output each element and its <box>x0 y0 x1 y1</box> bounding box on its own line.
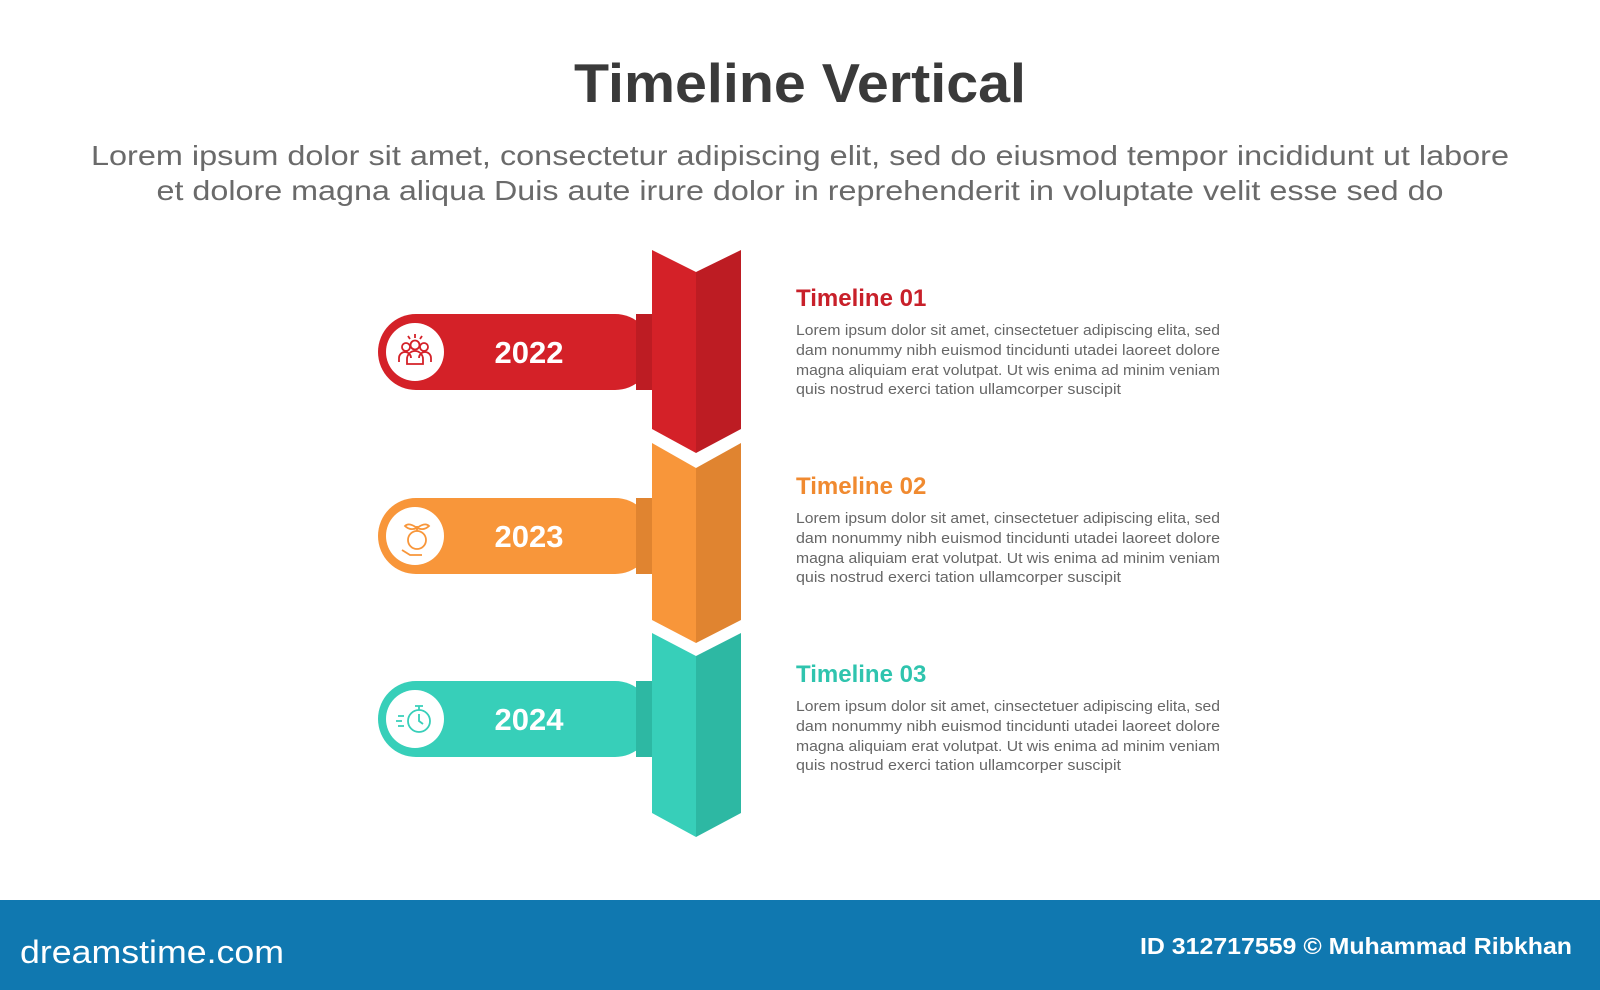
item 1: 2022 pill <box>378 314 653 390</box>
icon: stopwatch <box>386 690 444 748</box>
text block 1 <box>796 285 1220 398</box>
item 3: 2024 pill: 2024 <box>495 702 564 737</box>
text block 1: magna aliquiam erat volutpat. Ut wis enima ad minim veniam <box>796 363 1220 379</box>
text block 3: Lorem ipsum dolor sit amet, cinsectetuer adipiscing elita, sed <box>796 699 1220 715</box>
text block 3: magna aliquiam erat volutpat. Ut wis enima ad minim veniam <box>796 739 1220 755</box>
text block 2: quis nostrud exerci tation ullamcorper suscipit <box>796 570 1121 586</box>
vertical arrow column <box>652 250 741 837</box>
title: Timeline Vertical <box>574 52 1026 114</box>
text block 1: Lorem ipsum dolor sit amet, cinsectetuer adipiscing elita, sed <box>796 323 1220 339</box>
footer bar: ID 312717559 © Muhammad Ribkhan <box>1140 933 1572 959</box>
text block 2: Lorem ipsum dolor sit amet, cinsectetuer adipiscing elita, sed <box>796 511 1220 527</box>
text block 3: Timeline 03 <box>796 661 926 688</box>
text block 2 <box>796 473 1220 586</box>
text block 1: Timeline 01 <box>796 285 926 312</box>
item 2: 2023 pill: 2023 <box>495 519 563 554</box>
subtitle: et dolore magna aliqua Duis aute irure dolor in reprehenderit in voluptate velit esse sed do <box>156 175 1444 206</box>
subtitle: Lorem ipsum dolor sit amet, consectetur adipiscing elit, sed do eiusmod tempor incididunt ut labore <box>91 140 1509 171</box>
text block 2: magna aliquiam erat volutpat. Ut wis enima ad minim veniam <box>796 551 1220 567</box>
item 1: 2022 pill: 2022 <box>495 335 563 370</box>
text block 3 <box>796 661 1220 774</box>
footer bar <box>0 900 1600 990</box>
text block 1: quis nostrud exerci tation ullamcorper suscipit <box>796 382 1121 398</box>
icon: people <box>386 323 444 381</box>
footer bar: dreamstime.com <box>20 934 284 970</box>
text block 3: quis nostrud exerci tation ullamcorper suscipit <box>796 758 1121 774</box>
text block 1: dam nonummy nibh euismod tincidunti utadei laoreet dolore <box>796 343 1220 359</box>
text block 3: dam nonummy nibh euismod tincidunti utadei laoreet dolore <box>796 719 1220 735</box>
item 2: 2023 pill <box>378 498 653 574</box>
text block 2: dam nonummy nibh euismod tincidunti utadei laoreet dolore <box>796 531 1220 547</box>
subtitle <box>91 140 1509 206</box>
text block 2: Timeline 02 <box>796 473 926 500</box>
icon: globe plant <box>386 507 444 565</box>
item 3: 2024 pill <box>378 681 653 757</box>
